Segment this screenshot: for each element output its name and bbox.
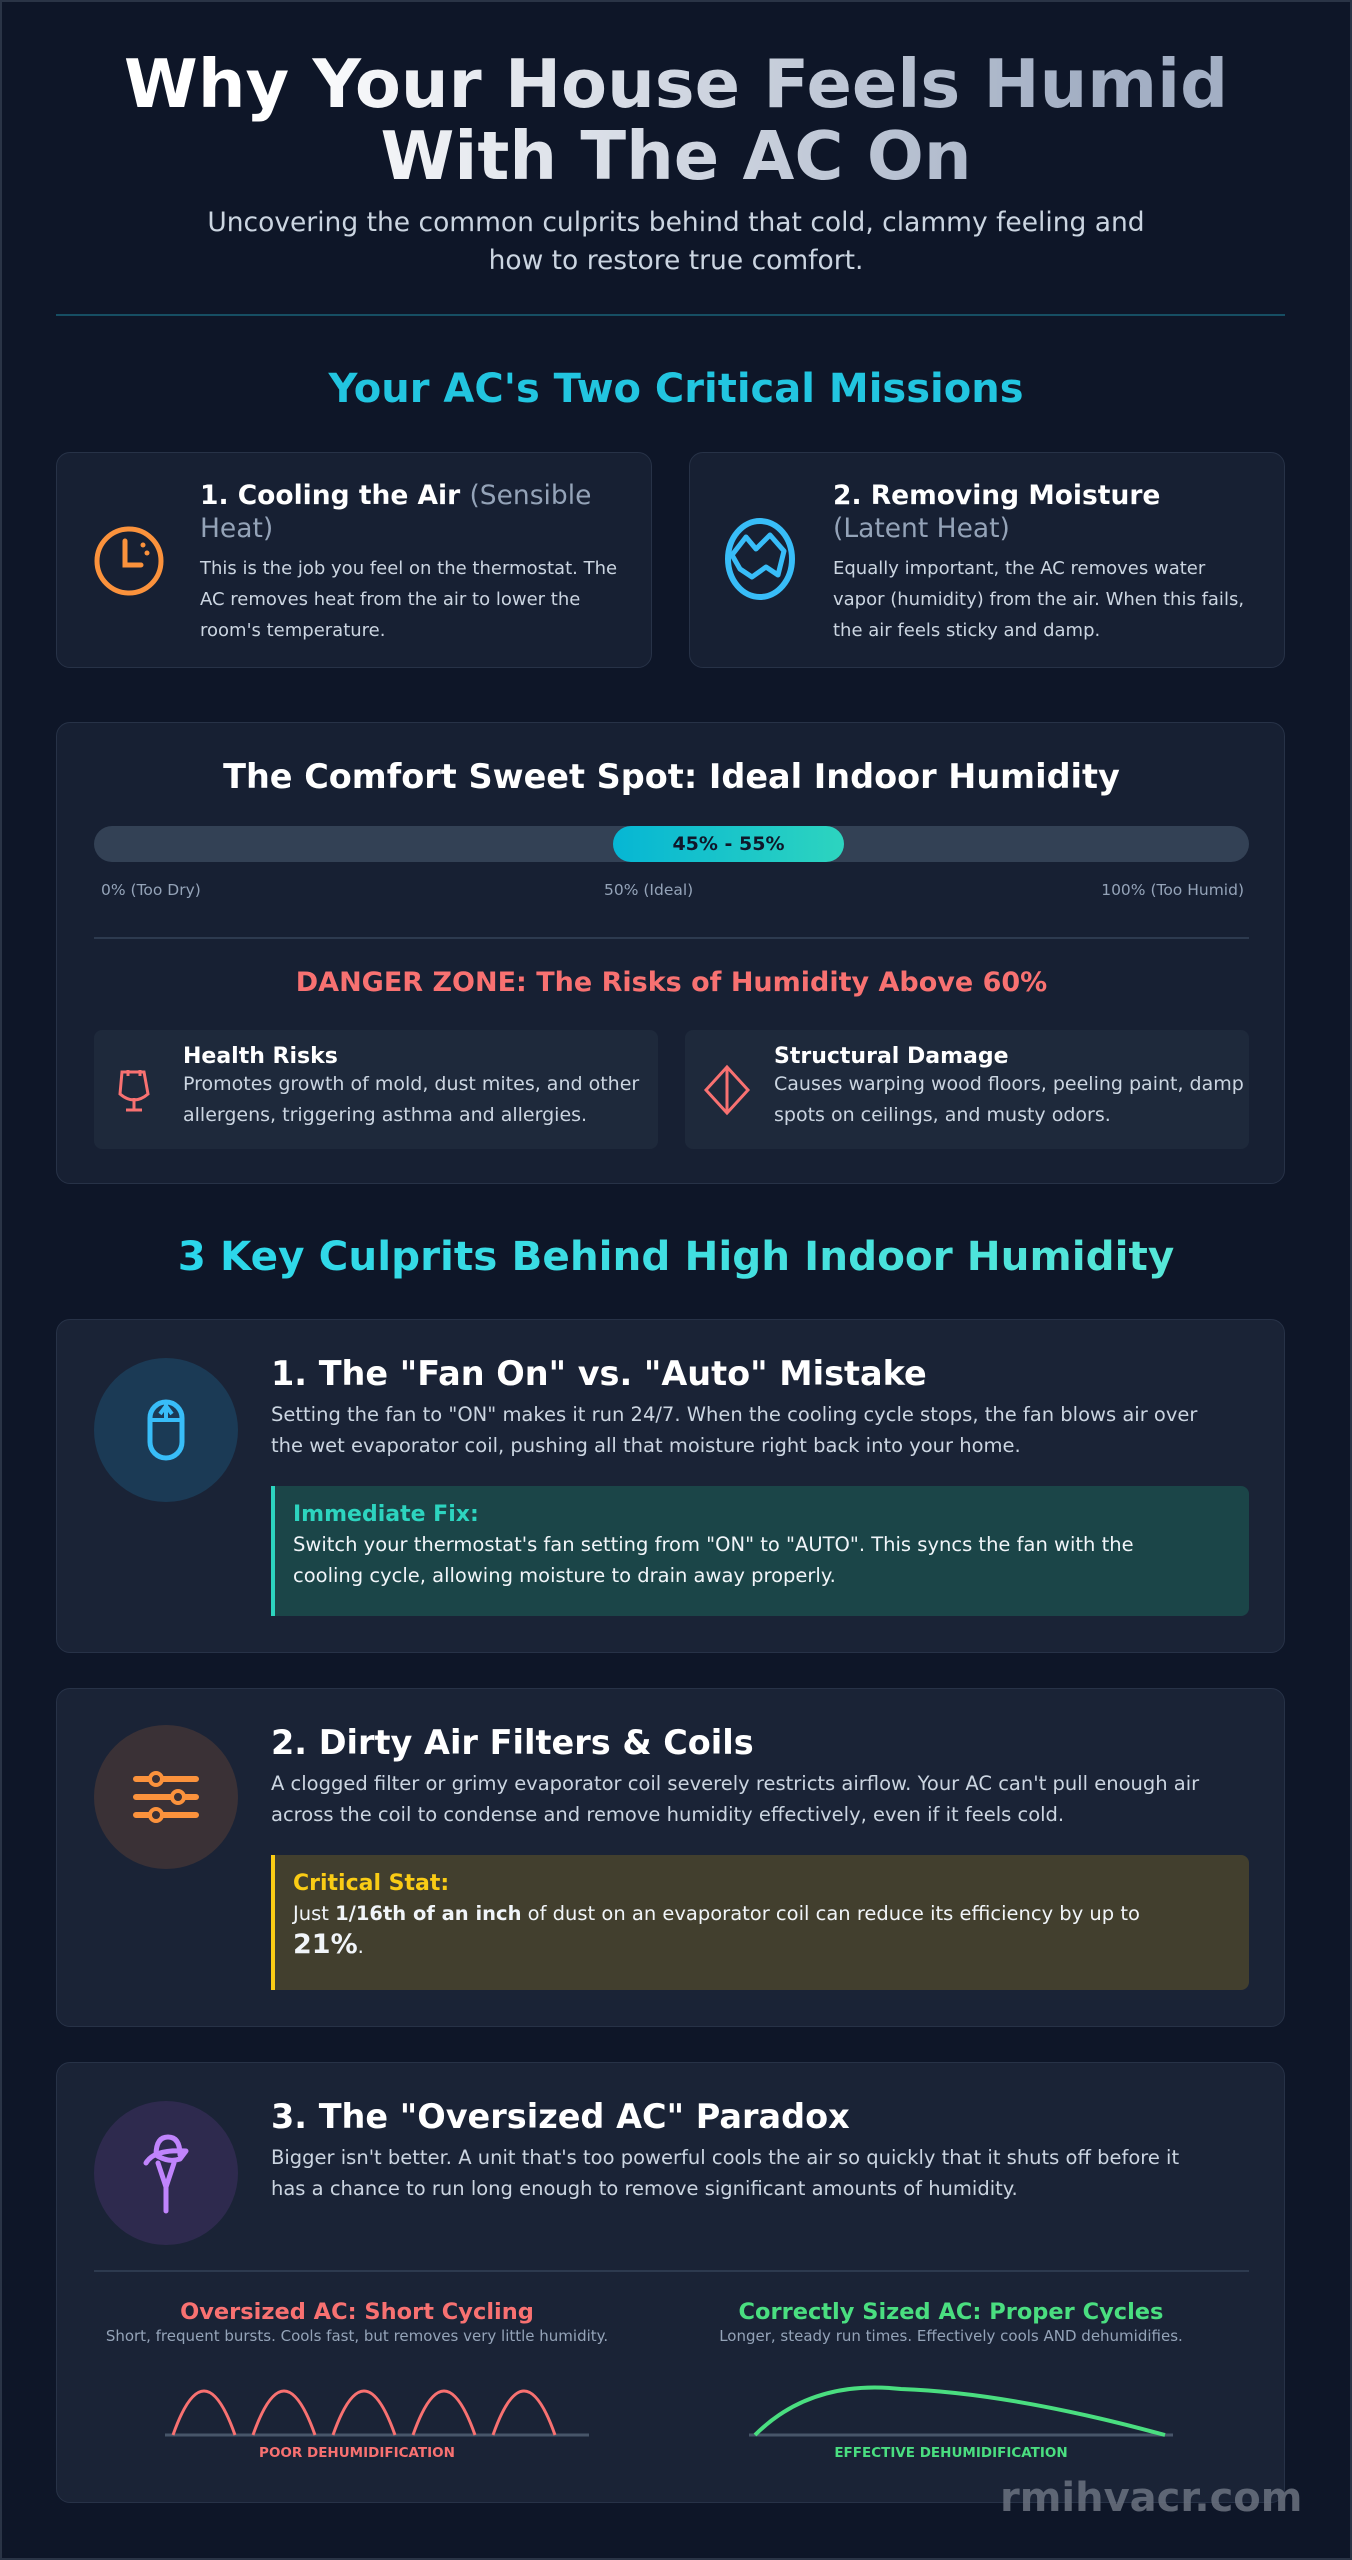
callout: immediate fix [271,1486,1249,1616]
callout: immediate fix: Switch your thermostat's fan setting from "ON" to "AUTO". This syncs the fan with the cooling cycle, allowing moisture to drain away properly. [293,1533,1134,1587]
title: Why Your House Feels Humid [124,45,1228,123]
icon: sliders [94,1725,238,1869]
panel: culprit 2 [56,1688,1285,2027]
text: culprit 1 [271,1354,1198,1457]
heading: danger zone: DANGER ZONE: The Risks of Humidity Above 60% [296,967,1047,998]
panel: comfort sweet spot [56,722,1285,1184]
chart: short cycling: Oversized AC: Short Cycling [180,2299,534,2325]
callout: immediate fix: Immediate Fix: [293,1502,479,1527]
heading: culprits: 3 Key Culprits Behind High Indoor Humidity [178,1232,1174,1280]
icon: fan/mouse [94,1358,238,1502]
bar labels: 50% (Ideal) [604,881,693,899]
text: culprit 3 [271,2097,1179,2200]
bar labels [101,881,1244,899]
bar labels: 100% (Too Humid) [1101,881,1244,899]
text: moisture: 2. Removing Moisture (Latent Heat) [833,480,1160,544]
chart: proper cycles: Correctly Sized AC: Proper Cycles [739,2299,1163,2325]
panel: health risks [94,1030,658,1149]
heading: two missions: Your AC's Two Critical Missions [328,366,1024,412]
text: culprit 3: Bigger isn't better. A unit that's too powerful cools the air so quickly that it shuts off before it has a chance to run long enough to remove significant amounts of humidity. [271,2146,1179,2200]
callout: critical stat: Just 1/16th of an inch of dust on an evaporator coil can reduce its efficiency by up to 21%. [293,1902,1140,1960]
chart: short cycling: POOR DEHUMIDIFICATION [259,2445,455,2461]
subtitle: Uncovering the common culprits behind that cold, clammy feeling and how to restore true comfort. [207,207,1145,276]
callout: critical stat: Critical Stat: [293,1871,449,1896]
text: moisture [833,480,1244,641]
title [0,48,1352,192]
panel: structural damage: Causes warping wood floors, peeling paint, damp spots on ceilings, and musty odors. [774,1073,1244,1126]
panel: health risks: Health Risks [183,1044,338,1069]
text: cooling: 1. Cooling the Air (Sensible Heat) [200,480,591,544]
panel: structural damage [685,1030,1249,1149]
icon: clock [94,526,164,596]
title: With The AC On [380,117,972,195]
chart: short cycling [106,2299,608,2461]
text: culprit 2: A clogged filter or grimy evaporator coil severely restricts airflow. Your AC can't pull enough air across the coil to condense and remove humidity effectively, even if it feels cold. [271,1772,1199,1826]
icon: health [118,1070,150,1112]
panel: health risks: Promotes growth of mold, dust mites, and other allergens, triggering asthma and allergies. [183,1073,639,1126]
bar labels: 0% (Too Dry) [101,881,201,899]
panel: culprit 1 [56,1319,1285,1653]
text: culprit 1: Setting the fan to "ON" makes it run 24/7. When the cooling cycle stops, the fan blows air over the wet evaporator coil, pushing all that moisture right back into your home. [271,1403,1197,1457]
chart: proper cycles [719,2299,1183,2461]
bar chart: humidity [94,826,1249,862]
panel: culprit 3 [56,2062,1285,2503]
watermark: rmihvacr.com [1000,2475,1302,2521]
chart: proper cycles: Longer, steady run times. Effectively cools AND dehumidifies. [719,2327,1183,2345]
icon: moisture [725,518,795,600]
text: cooling: This is the job you feel on the thermostat. The AC removes heat from the air to lower the room's temperature. [200,558,617,641]
text: cooling [200,480,617,641]
text: culprit 2: 2. Dirty Air Filters & Coils [271,1723,754,1762]
bar chart: humidity: 45% - 55% [672,833,785,855]
icon: diamond [704,1064,750,1116]
text: culprit 1: 1. The "Fan On" vs. "Auto" Mistake [271,1354,927,1393]
heading: comfort: The Comfort Sweet Spot: Ideal Indoor Humidity [223,757,1120,796]
icon: purple [94,2101,238,2245]
text: moisture: Equally important, the AC removes water vapor (humidity) from the air. When this fails, the air feels sticky and damp. [833,558,1244,641]
panel: structural damage: Structural Damage [774,1044,1009,1069]
panel: mission 2 [689,452,1285,668]
chart: short cycling: Short, frequent bursts. Cools fast, but removes very little humidity. [106,2327,608,2345]
panel: mission 1 [56,452,652,668]
text: culprit 2 [271,1723,1200,1826]
text: culprit 3: 3. The "Oversized AC" Paradox [271,2097,850,2136]
callout: critical stat [271,1855,1249,1990]
chart: proper cycles: EFFECTIVE DEHUMIDIFICATION [834,2445,1068,2461]
